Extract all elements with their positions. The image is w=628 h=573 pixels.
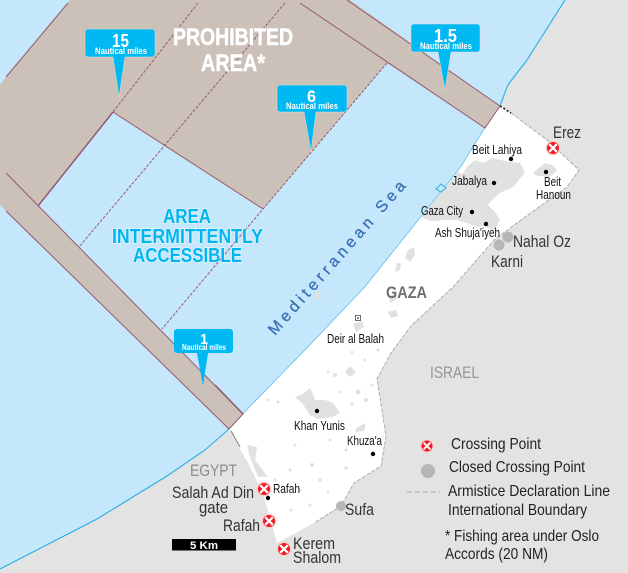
heading: prohibited area: AREA* bbox=[201, 50, 266, 77]
legend: Crossing Point bbox=[451, 436, 541, 453]
legend icon: crossing point bbox=[420, 439, 434, 453]
legend bbox=[407, 436, 610, 563]
crossing icon: Erez bbox=[546, 140, 560, 156]
label: Mediterranean Sea: Mediterranean Sea bbox=[265, 178, 409, 339]
territory labels: EGYPT bbox=[190, 461, 237, 480]
territory labels bbox=[190, 283, 479, 480]
city dots bbox=[266, 157, 548, 500]
callout: 1 nautical mile: 1 bbox=[200, 331, 208, 348]
legend: International Boundary bbox=[448, 502, 587, 519]
city labels: Khan Yunis bbox=[294, 419, 345, 433]
crossing labels: Nahal Oz bbox=[513, 232, 571, 251]
icon: Deir al Balah marker bbox=[356, 316, 360, 320]
callout: 15 nautical miles bbox=[85, 29, 155, 97]
crossing icon: Rafah bbox=[262, 514, 276, 528]
city labels: Hanoun bbox=[536, 188, 571, 202]
crossing labels: Karni bbox=[491, 252, 523, 271]
prohibited area bbox=[0, 0, 500, 209]
heading: area intermittently accessible: AREA bbox=[163, 206, 211, 228]
callout: 1 nautical mile bbox=[174, 329, 233, 386]
callout: 1.5 nautical miles: Nautical miles bbox=[420, 41, 472, 51]
crossing labels: Kerem bbox=[293, 534, 335, 553]
callout: 6 nautical miles bbox=[277, 85, 347, 152]
armistice line bbox=[314, 113, 579, 523]
zone boundary lines bbox=[6, 0, 500, 429]
built-up areas bbox=[247, 158, 557, 511]
crossing icon: Rafah north bbox=[256, 482, 272, 496]
crossing labels: Salah Ad Din bbox=[172, 483, 254, 502]
city labels: Beit Lahiya bbox=[472, 143, 522, 157]
crossing labels: Sufa bbox=[345, 500, 374, 519]
city labels: Khuza'a bbox=[347, 434, 382, 448]
Gaza Strip territory bbox=[229, 106, 579, 543]
border marks at north end bbox=[500, 106, 511, 113]
city labels: Jabalya bbox=[452, 174, 487, 188]
territory labels: ISRAEL bbox=[430, 363, 479, 382]
legend line: armistice bbox=[407, 491, 440, 493]
callout: 15 nautical miles: Nautical miles bbox=[95, 46, 147, 56]
crossing labels: gate bbox=[199, 498, 228, 517]
legend icon: closed crossing bbox=[421, 464, 435, 478]
city labels: Beit bbox=[544, 175, 561, 189]
scale bar: 5 Km bbox=[190, 540, 218, 552]
heading: prohibited area bbox=[173, 24, 293, 77]
heading: area intermittently accessible: ACCESSIBLE bbox=[133, 245, 242, 267]
scale bar bbox=[172, 539, 236, 552]
callout: 6 nautical miles: Nautical miles bbox=[286, 101, 338, 111]
crossing labels: Rafah bbox=[223, 516, 260, 535]
small coast marker bbox=[436, 184, 446, 192]
dashed nautical mile lines bbox=[79, 3, 387, 329]
callout: 1 nautical mile: Nautical miles bbox=[182, 343, 226, 352]
heading: prohibited area: PROHIBITED bbox=[173, 24, 293, 51]
callout: 15 nautical miles: 15 bbox=[112, 31, 129, 51]
heading: area intermittently accessible: INTERMITTENTLY bbox=[112, 226, 264, 248]
crossing icon: Kerem Shalom bbox=[276, 542, 292, 556]
crossing labels: Erez bbox=[553, 123, 581, 142]
legend: * Fishing area under Oslo bbox=[445, 528, 599, 545]
callout: 6 nautical miles: 6 bbox=[307, 87, 316, 106]
crossing labels bbox=[172, 123, 581, 567]
callout: 1.5 nautical miles: 1.5 bbox=[434, 26, 457, 46]
city labels: Rafah bbox=[273, 482, 300, 496]
heading: area intermittently accessible bbox=[112, 206, 264, 267]
legend: Accords (20 NM) bbox=[445, 546, 548, 563]
closed crossing points bbox=[336, 232, 514, 511]
Egypt border bbox=[231, 431, 240, 447]
callout: 1.5 nautical miles bbox=[411, 24, 480, 90]
crossing labels: Shalom bbox=[293, 548, 341, 567]
city labels: Gaza City bbox=[421, 204, 464, 218]
city labels: Deir al Balah bbox=[327, 332, 384, 346]
prohibited strip south bbox=[0, 167, 243, 429]
legend: Closed Crossing Point bbox=[449, 459, 585, 476]
city labels: Ash Shuja'iyeh bbox=[435, 226, 500, 240]
city labels bbox=[273, 143, 571, 496]
territory labels: GAZA bbox=[386, 283, 427, 302]
